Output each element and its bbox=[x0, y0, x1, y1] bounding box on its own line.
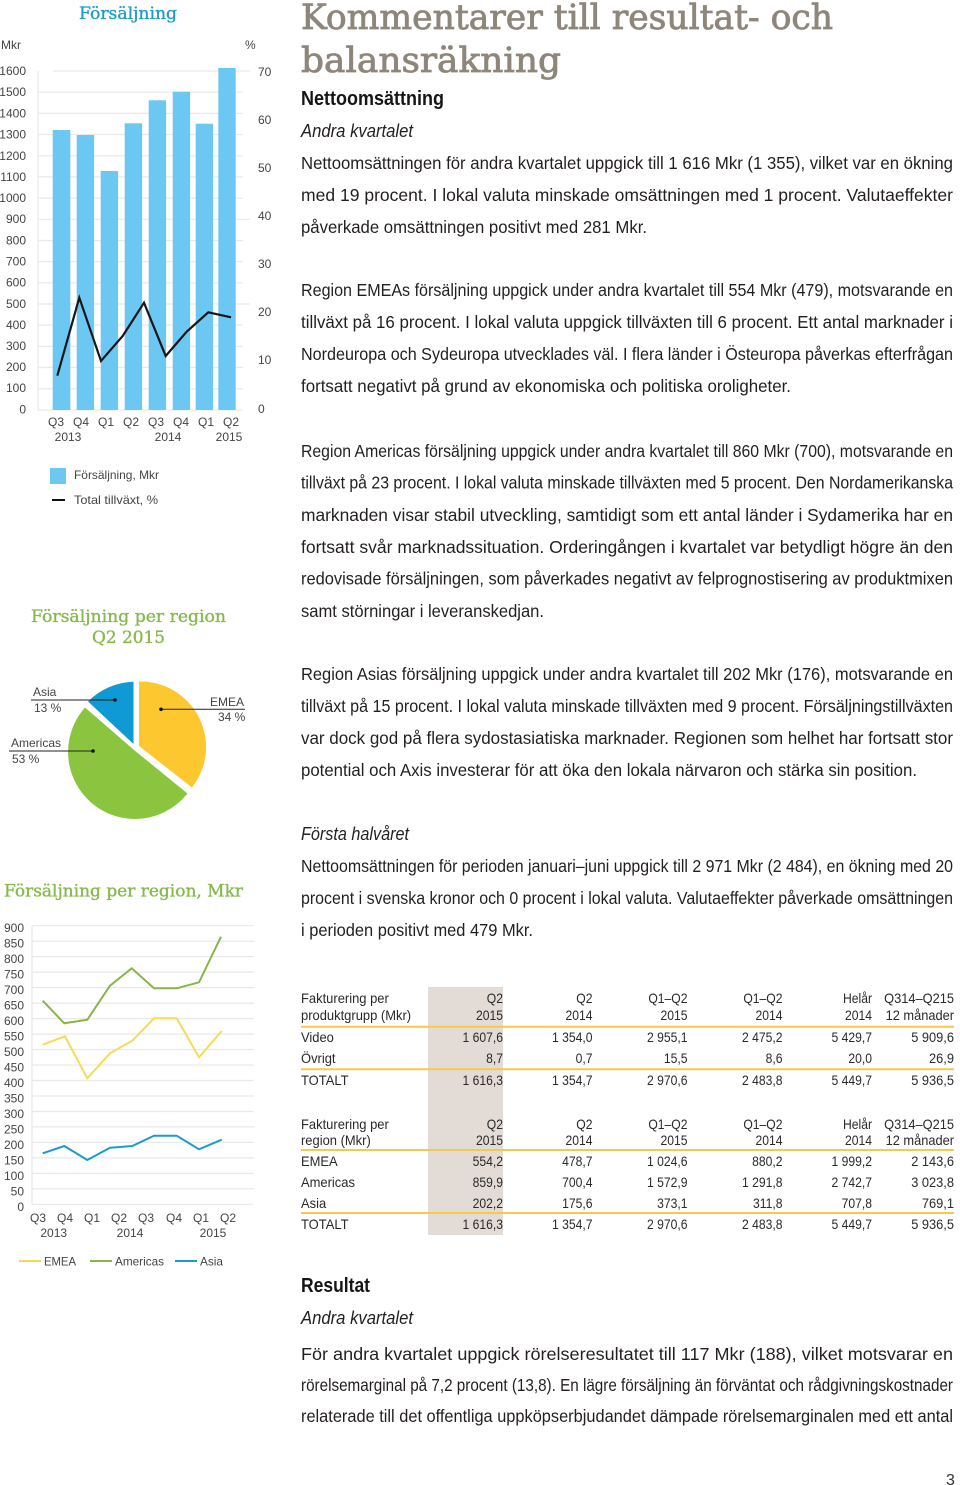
y axis labels: 450 bbox=[4, 1060, 24, 1074]
table row labels: Fakturering per bbox=[301, 991, 389, 1006]
column: Q2 2015: 2015 bbox=[476, 1007, 503, 1023]
x axis labels: 2015 bbox=[216, 430, 243, 444]
column: Q314–Q215 12 månader: 769,1 bbox=[922, 1196, 954, 1211]
text block: Region Americas: marknaden visar stabil utveckling, samtidigt som ett antal länder i Sydamerika har en bbox=[301, 505, 953, 525]
right axis unit: % bbox=[245, 38, 256, 52]
column: Q1–Q2 2014: 311,8 bbox=[753, 1195, 782, 1211]
column: Q1–Q2 2014: 2 483,8 bbox=[742, 1216, 782, 1232]
right axis labels: 50 bbox=[258, 161, 272, 175]
heading: Försäljning per region Q2 2015 bbox=[31, 607, 226, 648]
legend: Försäljning, Mkr bbox=[74, 468, 159, 482]
column: Q2 2014: 175,6 bbox=[562, 1195, 592, 1211]
left axis labels: 600 bbox=[6, 276, 26, 290]
column: Q1–Q2 2014: Q1–Q2 bbox=[743, 990, 782, 1006]
table row labels: region (Mkr) bbox=[301, 1133, 371, 1148]
column: Q1–Q2 2015: 2 955,1 bbox=[647, 1029, 688, 1045]
column: Q1–Q2 2015: 2015 bbox=[660, 1132, 688, 1148]
right axis labels: 0 bbox=[258, 402, 265, 416]
left axis labels: 1300 bbox=[0, 128, 26, 142]
column: Q2 2014: 1 354,0 bbox=[552, 1029, 592, 1045]
left axis labels: 1100 bbox=[0, 170, 26, 184]
left axis labels: 1500 bbox=[0, 85, 26, 99]
column: Q2 2015: Q2 bbox=[487, 990, 503, 1006]
y axis labels: 750 bbox=[4, 968, 24, 982]
column: Q314–Q215 12 månader bbox=[884, 991, 955, 1232]
table row labels: TOTALT bbox=[301, 1073, 348, 1088]
y axis labels: 500 bbox=[4, 1045, 24, 1059]
column: Q1–Q2 2014 bbox=[742, 990, 782, 1232]
x axis labels: 2014 bbox=[117, 1226, 144, 1240]
text block: Första halvåret bbox=[301, 856, 953, 940]
right axis labels: 10 bbox=[258, 353, 272, 367]
column: Q314–Q215 12 månader: 5 936,5 bbox=[911, 1217, 954, 1232]
column: Helår 2014: 2014 bbox=[845, 1007, 872, 1023]
right axis labels: 60 bbox=[258, 113, 272, 127]
y axis labels: 550 bbox=[4, 1030, 24, 1044]
text block: Nettoomsättning Q2: med 19 procent. I lokal valuta minskade omsättningen med 1 procent. Valutaeffekter bbox=[301, 185, 953, 205]
x axis labels: 2013 bbox=[40, 1226, 67, 1240]
left axis labels: 1000 bbox=[0, 191, 26, 205]
line: Asia bbox=[43, 1136, 222, 1160]
column: Q2 2014: 478,7 bbox=[562, 1153, 592, 1169]
right axis labels: 20 bbox=[258, 305, 272, 319]
column: Q2 2014: 1 354,7 bbox=[552, 1072, 592, 1088]
x axis labels: Q4 bbox=[166, 1211, 182, 1225]
y axis labels bbox=[4, 921, 24, 1214]
x axis labels: Q3 bbox=[138, 1211, 154, 1225]
column: Helår 2014: 707,8 bbox=[842, 1195, 872, 1211]
column: Q314–Q215 12 månader: 5 936,5 bbox=[911, 1073, 954, 1088]
legend bbox=[19, 1254, 223, 1268]
column: Q1–Q2 2015: 373,1 bbox=[657, 1195, 688, 1211]
column: Q314–Q215 12 månader: 12 månader bbox=[886, 1008, 955, 1023]
column: Q314–Q215 12 månader: 26,9 bbox=[929, 1051, 954, 1066]
table row labels: Övrigt bbox=[301, 1051, 336, 1066]
left axis labels: 500 bbox=[6, 297, 26, 311]
y axis labels: 250 bbox=[4, 1122, 24, 1136]
column: Q1–Q2 2015: 1 572,9 bbox=[647, 1174, 688, 1190]
x axis labels: 2015 bbox=[200, 1226, 227, 1240]
column: Q314–Q215 12 månader: 12 månader bbox=[886, 1133, 955, 1148]
column: Q1–Q2 2014: 2 483,8 bbox=[742, 1072, 782, 1088]
column: Q1–Q2 2014: 1 291,8 bbox=[742, 1174, 782, 1190]
column: Q1–Q2 2015: 15,5 bbox=[664, 1050, 688, 1066]
column: Q2 2014 bbox=[552, 990, 592, 1232]
column: Q2 2015: 8,7 bbox=[486, 1050, 503, 1066]
text block: Region Asia: var dock god på flera sydostasiatiska marknader. Regionen som helhet har fortsatt stor bbox=[301, 728, 953, 748]
left axis labels: 1400 bbox=[0, 106, 26, 120]
column: Q2 2014: 2014 bbox=[565, 1007, 592, 1023]
column: Q1–Q2 2014: 2 475,2 bbox=[742, 1029, 782, 1045]
text block: Region Americas: samt störningar i leveranskedjan. bbox=[301, 601, 544, 621]
x axis labels: Q4 bbox=[73, 415, 89, 429]
column: Helår 2014: Helår bbox=[843, 1116, 873, 1132]
y axis labels: 800 bbox=[4, 952, 24, 966]
column: Q2 2014: Q2 bbox=[576, 990, 592, 1006]
x axis labels: Q2 bbox=[220, 1211, 236, 1225]
left axis labels: 100 bbox=[6, 381, 26, 395]
legend bbox=[50, 468, 159, 507]
y axis labels: 400 bbox=[4, 1076, 24, 1090]
subheading: Första halvåret: Första halvåret bbox=[301, 824, 410, 844]
text block: Region EMEA: tillväxt på 16 procent. I lokal valuta uppgick tillväxten till 6 procent. Ett antal marknader i bbox=[301, 312, 953, 332]
table row labels: EMEA bbox=[301, 1154, 338, 1169]
label: EMEA: 34 % bbox=[218, 710, 246, 724]
left axis labels: 900 bbox=[6, 212, 26, 226]
title: balansräkning bbox=[301, 41, 561, 81]
column: Helår 2014: 20,0 bbox=[848, 1050, 872, 1066]
left axis labels: 0 bbox=[19, 402, 26, 416]
right axis labels: 30 bbox=[258, 257, 272, 271]
y axis labels: 100 bbox=[4, 1169, 24, 1183]
heading: Försäljning per region Q2 2015: Försäljning per region bbox=[31, 607, 226, 627]
y axis labels: 600 bbox=[4, 1014, 24, 1028]
x axis labels: 2013 bbox=[55, 430, 82, 444]
column: Q314–Q215 12 månader: 5 909,6 bbox=[911, 1030, 954, 1045]
x axis labels: Q3 bbox=[48, 415, 64, 429]
x axis labels bbox=[48, 415, 243, 444]
column: Q2 2014: Q2 bbox=[576, 1116, 592, 1132]
panel: sales chart bbox=[0, 4, 272, 507]
highlighted column bbox=[428, 987, 503, 1235]
column: Helår 2014 bbox=[831, 990, 873, 1232]
text block: Resultat: För andra kvartalet uppgick rörelseresultatet till 117 Mkr (188), vilket motsvarar en bbox=[301, 1344, 953, 1364]
label: Americas: Americas bbox=[11, 736, 61, 750]
table row labels: Fakturering per bbox=[301, 1117, 389, 1132]
column: Q2 2015: 859,9 bbox=[473, 1174, 503, 1190]
table row labels: Video bbox=[301, 1030, 334, 1045]
panel: region pie chart bbox=[9, 607, 246, 819]
x axis labels: Q3 bbox=[30, 1211, 46, 1225]
pie slice: Americas bbox=[68, 708, 188, 819]
label: Asia: 13 % bbox=[34, 701, 62, 715]
column: Helår 2014: 5 449,7 bbox=[831, 1072, 872, 1088]
heading: Resultat: Resultat bbox=[301, 1275, 370, 1297]
x axis labels: Q1 bbox=[98, 415, 114, 429]
column: Q2 2015: 2015 bbox=[476, 1132, 503, 1148]
text block: Region Americas bbox=[301, 441, 953, 621]
column: Q1–Q2 2014: Q1–Q2 bbox=[743, 1116, 782, 1132]
column: Q314–Q215 12 månader: Q314–Q215 bbox=[884, 991, 954, 1006]
subheading: Andra kvartalet: Andra kvartalet bbox=[300, 121, 414, 141]
left axis labels: 1200 bbox=[0, 149, 26, 163]
column: Q1–Q2 2015: 2 970,6 bbox=[647, 1216, 688, 1232]
subheading: Andra kvartalet: Andra kvartalet bbox=[300, 1308, 414, 1328]
x axis labels: Q2 bbox=[111, 1211, 127, 1225]
text block: Nettoomsättning Q2 bbox=[301, 153, 953, 237]
column: Helår 2014: 5 429,7 bbox=[831, 1029, 872, 1045]
y axis labels: 50 bbox=[11, 1184, 24, 1198]
column: Q2 2015: 1 616,3 bbox=[462, 1072, 503, 1088]
column: Helår 2014: 5 449,7 bbox=[831, 1216, 872, 1232]
column: Helår 2014: Helår bbox=[843, 990, 873, 1006]
x axis labels: Q3 bbox=[148, 415, 164, 429]
table row labels bbox=[301, 991, 411, 1232]
pie slice: Asia bbox=[88, 682, 134, 744]
label: EMEA: EMEA bbox=[210, 695, 244, 709]
table row labels: Americas bbox=[301, 1175, 355, 1190]
table row labels: produktgrupp (Mkr) bbox=[301, 1008, 411, 1023]
column: Q2 2014: 2014 bbox=[565, 1132, 592, 1148]
heading: Försäljning: Försäljning bbox=[79, 4, 177, 24]
x axis labels: Q2 bbox=[223, 415, 239, 429]
text block: Region EMEA: fortsatt negativt på grund av ekonomiska och politiska oroligheter. bbox=[301, 376, 791, 396]
text block: Region Asia: potential och Axis investerar för att öka den lokala närvaron och stärka sin position. bbox=[301, 760, 917, 780]
right axis labels: 40 bbox=[258, 209, 272, 223]
text block: Region Americas: fortsatt svår marknadssituation. Orderingången i kvartalet var betydligt högre än den bbox=[301, 537, 953, 557]
right axis labels bbox=[258, 65, 272, 416]
bars: quarterly sales bbox=[53, 68, 236, 410]
y axis labels: 200 bbox=[4, 1138, 24, 1152]
left axis labels: 700 bbox=[6, 254, 26, 268]
right axis labels: 70 bbox=[258, 65, 272, 79]
left axis labels: 800 bbox=[6, 234, 26, 248]
x axis labels: Q4 bbox=[57, 1211, 73, 1225]
y axis labels: 900 bbox=[4, 921, 24, 935]
x axis labels: Q4 bbox=[173, 415, 189, 429]
column: Q1–Q2 2014: 880,2 bbox=[752, 1153, 782, 1169]
title bbox=[301, 0, 833, 81]
legend: Total tillväxt, % bbox=[74, 493, 158, 507]
column: Q2 2015: 1 616,3 bbox=[462, 1216, 503, 1232]
column: Q2 2015: 202,2 bbox=[473, 1195, 503, 1211]
text block: Första halvåret: i perioden positivt med 479 Mkr. bbox=[301, 920, 533, 940]
x axis labels: Q2 bbox=[123, 415, 139, 429]
x axis labels: 2014 bbox=[155, 430, 182, 444]
column: Q314–Q215 12 månader: 3 023,8 bbox=[911, 1175, 954, 1190]
left axis labels: 300 bbox=[6, 339, 26, 353]
column: Q2 2015: Q2 bbox=[487, 1116, 503, 1132]
y axis labels: 850 bbox=[4, 936, 24, 950]
left axis labels: 400 bbox=[6, 318, 26, 332]
x axis labels: Q1 bbox=[198, 415, 214, 429]
y axis labels: 350 bbox=[4, 1092, 24, 1106]
column: Q1–Q2 2015 bbox=[647, 990, 688, 1232]
line: total growth bbox=[57, 298, 231, 376]
column: Q314–Q215 12 månader: Q314–Q215 bbox=[884, 1117, 954, 1132]
column: Q2 2015: 554,2 bbox=[473, 1153, 503, 1169]
column: Helår 2014: 2 742,7 bbox=[831, 1174, 872, 1190]
y axis labels: 700 bbox=[4, 983, 24, 997]
column: Helår 2014: 2014 bbox=[845, 1132, 872, 1148]
column: Q1–Q2 2015: 1 024,6 bbox=[647, 1153, 688, 1169]
column: Q2 2014: 700,4 bbox=[562, 1174, 592, 1190]
legend: EMEA bbox=[44, 1254, 76, 1268]
y axis labels: 300 bbox=[4, 1107, 24, 1121]
left axis unit: Mkr bbox=[1, 38, 21, 52]
column: Q1–Q2 2015: Q1–Q2 bbox=[648, 990, 688, 1006]
text block: Region Asia bbox=[301, 664, 953, 780]
column: Q314–Q215 12 månader: 2 143,6 bbox=[911, 1154, 954, 1169]
column: Q1–Q2 2015: 2015 bbox=[660, 1007, 688, 1023]
text block: Region EMEA bbox=[301, 280, 953, 396]
left axis labels: 1600 bbox=[0, 64, 26, 78]
column: Q1–Q2 2015: 2 970,6 bbox=[647, 1072, 688, 1088]
label: Asia: Asia bbox=[33, 685, 57, 699]
heading: Försäljning per region Q2 2015: Q2 2015 bbox=[92, 628, 165, 648]
y axis labels: 650 bbox=[4, 998, 24, 1012]
left axis labels bbox=[0, 64, 26, 416]
column: Q2 2015 bbox=[462, 990, 503, 1232]
y axis labels: 150 bbox=[4, 1154, 24, 1168]
text block: Nettoomsättning Q2: påverkade omsättningen positivt med 281 Mkr. bbox=[301, 217, 647, 237]
legend: Americas bbox=[115, 1254, 164, 1268]
heading: Nettoomsättning: Nettoomsättning bbox=[301, 88, 444, 110]
column: Q1–Q2 2015: Q1–Q2 bbox=[648, 1116, 688, 1132]
text block: Resultat bbox=[301, 1344, 953, 1426]
legend: Asia bbox=[200, 1254, 223, 1268]
column: Helår 2014: 1 999,2 bbox=[831, 1153, 872, 1169]
label: EMEA bbox=[159, 695, 246, 724]
y axis labels: 0 bbox=[17, 1200, 24, 1214]
column: Q1–Q2 2014: 2014 bbox=[755, 1007, 782, 1023]
column: Q1–Q2 2014: 8,6 bbox=[766, 1050, 782, 1066]
line: Americas bbox=[43, 937, 221, 1023]
heading: Försäljning per region, Mkr: Försäljning per region, Mkr bbox=[4, 882, 244, 902]
label: Americas bbox=[9, 736, 95, 766]
label: Asia bbox=[31, 685, 117, 715]
label: Americas: 53 % bbox=[12, 752, 40, 766]
x axis labels: Q1 bbox=[84, 1211, 100, 1225]
panel: region line chart bbox=[4, 882, 254, 1268]
table row labels: Asia bbox=[301, 1196, 327, 1211]
panel: billing tables bbox=[301, 987, 955, 1235]
column: Q1–Q2 2014: 2014 bbox=[755, 1132, 782, 1148]
column: Q2 2014: 0,7 bbox=[576, 1050, 592, 1066]
left axis labels: 200 bbox=[6, 360, 26, 374]
table row labels: TOTALT bbox=[301, 1217, 348, 1232]
pie slice: EMEA bbox=[139, 681, 206, 788]
x axis labels: Q1 bbox=[193, 1211, 209, 1225]
column: Q2 2015: 1 607,6 bbox=[462, 1029, 503, 1045]
x axis labels bbox=[30, 1211, 236, 1240]
line: EMEA bbox=[43, 1018, 222, 1078]
column: Q2 2014: 1 354,7 bbox=[552, 1216, 592, 1232]
